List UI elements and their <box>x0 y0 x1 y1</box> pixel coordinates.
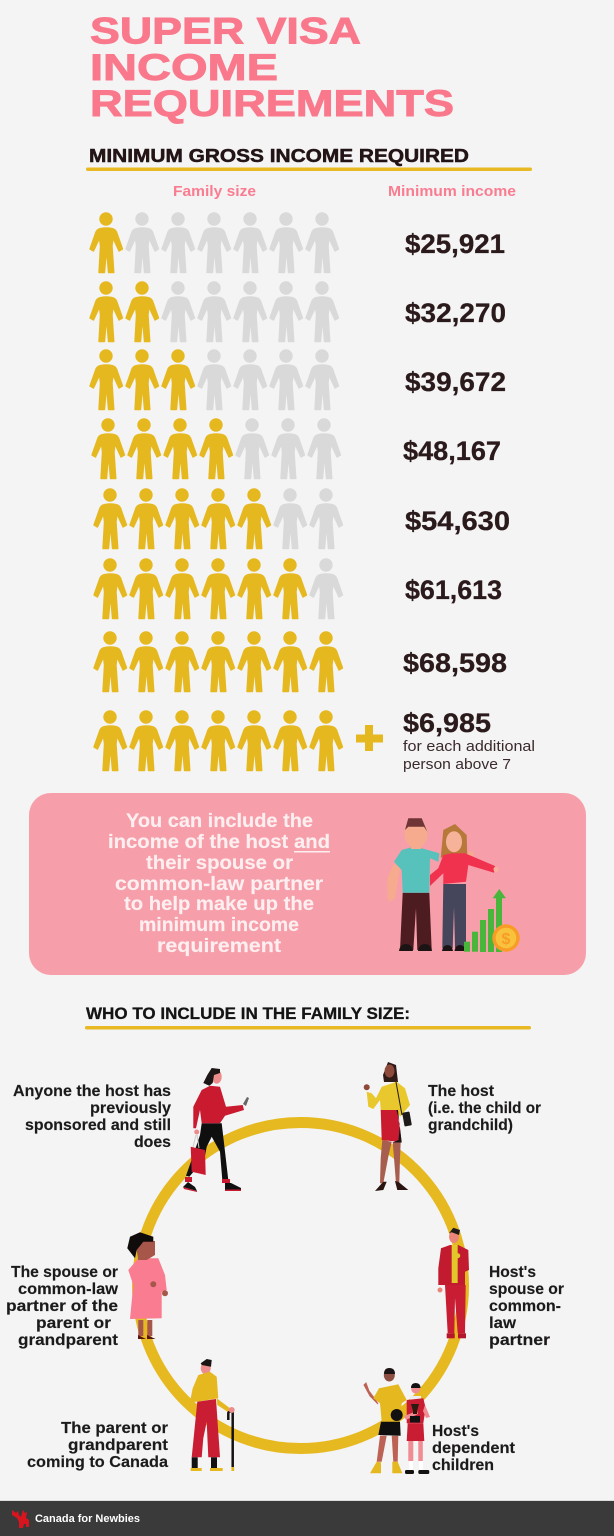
row: family of 5: $54,630 <box>405 506 510 536</box>
figure: spouse in pink <box>127 1232 168 1339</box>
ring <box>138 1122 464 1448</box>
label: dependent children: Host's <box>432 1423 479 1440</box>
label: the host: The host <box>428 1083 494 1100</box>
row: each additional person: for each additional <box>403 738 535 755</box>
label: spouse of parent: common-law <box>18 1281 119 1298</box>
label: dependent children: children <box>432 1457 494 1474</box>
column header: family size: Family size <box>173 183 256 200</box>
label: spouse of parent: parent or <box>36 1315 111 1332</box>
icon: plus <box>356 725 383 751</box>
label: host's spouse <box>489 1264 564 1349</box>
row: family of 1 <box>90 213 505 272</box>
row: each additional person: person above 7 <box>403 756 511 773</box>
panel text: to help make up the <box>124 894 314 915</box>
figure: host woman <box>364 1062 412 1191</box>
label: spouse of parent: grandparent <box>18 1332 118 1349</box>
label: anyone previously sponsored: does <box>134 1134 171 1151</box>
label: parent or grandparent <box>27 1420 168 1471</box>
label: the host: (i.e. the child or <box>428 1100 541 1117</box>
icon: couple <box>387 818 520 952</box>
chart: rising bars with arrow <box>464 889 506 952</box>
footer <box>0 1500 614 1536</box>
label: anyone previously sponsored: sponsored and still <box>25 1117 171 1134</box>
figure: woman with shopping bag <box>183 1068 249 1192</box>
title: INCOME <box>90 47 278 88</box>
label: the host <box>428 1083 541 1134</box>
label: anyone previously sponsored: Anyone the host has <box>13 1083 171 1100</box>
label: host's spouse: common- <box>489 1298 561 1315</box>
row: family of 7: $68,598 <box>403 648 507 678</box>
row: family of 6: $61,613 <box>405 575 502 605</box>
panel text: requirement <box>157 936 282 957</box>
heading: minimum gross income required <box>86 146 532 171</box>
row: family of 4: $48,167 <box>403 436 501 466</box>
label: anyone previously sponsored: previously <box>90 1100 171 1117</box>
label: dependent children: dependent <box>432 1440 515 1457</box>
row: each additional person <box>94 708 535 773</box>
panel text: income of the host and <box>108 832 330 853</box>
panel text <box>108 811 330 957</box>
row: family of 3 <box>90 350 506 410</box>
row: family of 2 <box>90 282 506 342</box>
older child <box>364 1368 407 1473</box>
footer: Canada for Newbies <box>35 1513 140 1525</box>
label: host's spouse: law <box>489 1315 517 1332</box>
title <box>90 10 454 124</box>
figure: host's spouse <box>438 1228 469 1338</box>
row: family of 2: $32,270 <box>405 298 506 328</box>
woman <box>430 824 498 951</box>
row: family of 3: $39,672 <box>405 367 506 397</box>
label: dependent children <box>432 1423 515 1474</box>
label: host's spouse: partner <box>489 1332 550 1349</box>
column header: minimum income: Minimum income <box>388 183 516 200</box>
panel text: minimum income <box>139 915 299 936</box>
label: spouse of parent: The spouse or <box>11 1264 118 1281</box>
heading: minimum gross income required: MINIMUM GROSS INCOME REQUIRED <box>89 146 469 166</box>
label: spouse of parent <box>6 1264 119 1349</box>
row: family of 5 <box>94 489 510 548</box>
label: parent or grandparent: coming to Canada <box>27 1454 168 1471</box>
title: SUPER VISA <box>90 10 361 52</box>
panel text: common-law partner <box>115 874 324 895</box>
title: REQUIREMENTS <box>90 83 454 124</box>
row: family of 7 <box>94 632 507 692</box>
panel text: their spouse or <box>146 853 294 874</box>
label: host's spouse: Host's <box>489 1264 536 1281</box>
row: each additional person: $6,985 <box>403 708 491 738</box>
man <box>387 818 474 951</box>
icon: red moose <box>12 1510 29 1528</box>
label: parent or grandparent: The parent or <box>61 1420 168 1437</box>
panel: include host and spouse income <box>29 793 586 975</box>
row: family of 4 <box>92 419 501 478</box>
heading: who to include: WHO TO INCLUDE IN THE FAMILY SIZE: <box>86 1004 410 1023</box>
row: family of 6 <box>94 559 502 618</box>
label: parent or grandparent: grandparent <box>68 1437 168 1454</box>
row: family of 1: $25,921 <box>405 229 505 259</box>
figure: elderly parent with cane <box>190 1359 235 1471</box>
panel text: You can include the <box>126 811 313 832</box>
label: spouse of parent: partner of the <box>6 1298 118 1315</box>
icon: coin: $ <box>502 931 511 948</box>
figure: dependent children <box>364 1368 430 1474</box>
label: host's spouse: spouse or <box>489 1281 564 1298</box>
heading: who to include <box>85 1004 531 1030</box>
younger child <box>404 1383 430 1474</box>
label: the host: grandchild) <box>428 1117 513 1134</box>
label: anyone previously sponsored <box>13 1083 171 1151</box>
